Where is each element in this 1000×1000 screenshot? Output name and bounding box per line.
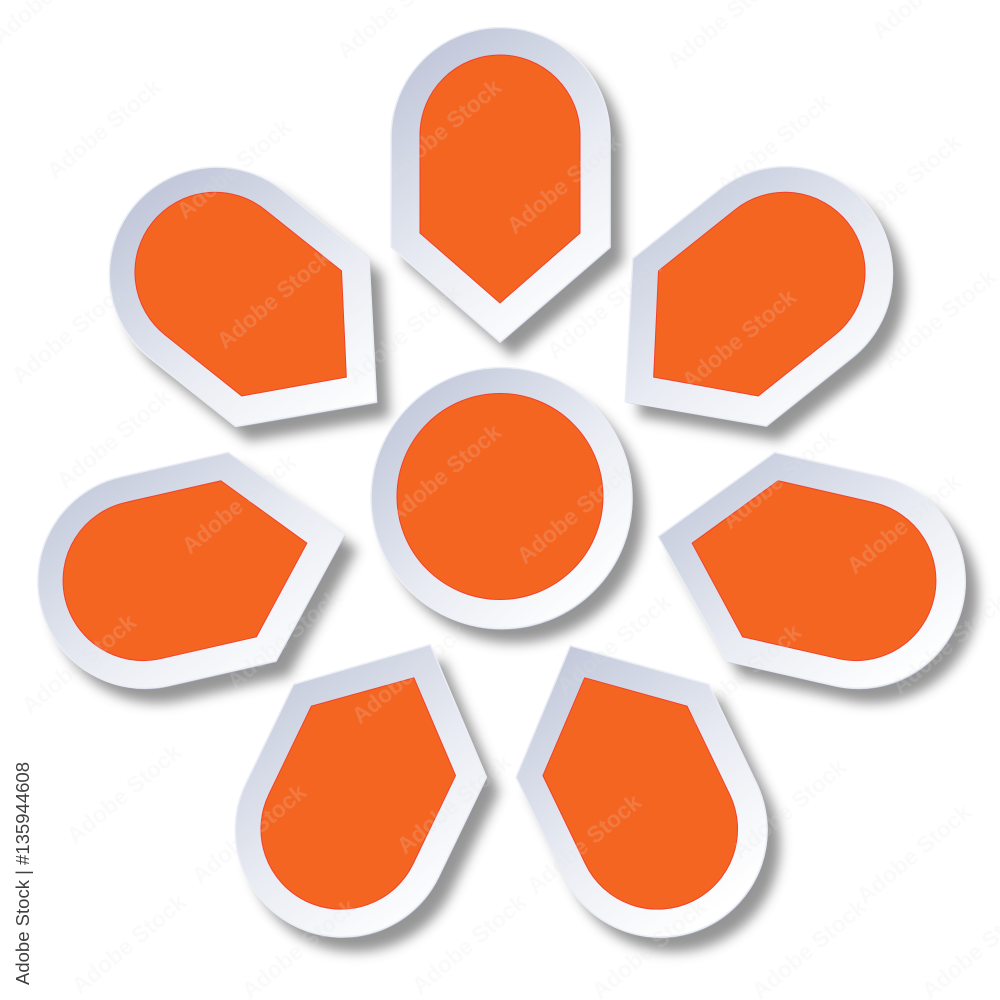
watermark pattern: Adobe Stock: [42, 73, 166, 184]
watermark pattern: Adobe Stock: [542, 253, 666, 364]
watermark pattern: Adobe Stock: [552, 588, 676, 699]
watermark pattern: Adobe Stock: [512, 458, 636, 569]
petal: top: [391, 28, 623, 357]
watermark pattern: Adobe Stock: [712, 88, 836, 199]
watermark pattern: Adobe Stock: [727, 753, 851, 864]
watermark pattern: Adobe Stock: [842, 468, 966, 579]
watermark pattern: Adobe Stock: [392, 748, 516, 859]
watermark pattern: Adobe Stock: [852, 798, 976, 909]
watermark pattern: Adobe Stock: [877, 263, 1000, 374]
watermark pattern: Adobe Stock: [682, 618, 806, 729]
watermark pattern: Adobe Stock: [7, 278, 131, 389]
watermark pattern: Adobe Stock: [407, 888, 531, 999]
watermark pattern: Adobe Stock: [382, 418, 506, 529]
watermark pattern: Adobe Stock: [172, 113, 296, 224]
watermark pattern: Adobe Stock: [382, 73, 506, 184]
petal: lower left: [199, 599, 541, 988]
watermark pattern: Adobe Stock: [342, 278, 466, 389]
petal: right: [635, 431, 999, 724]
petal: upper right: [558, 123, 949, 500]
watermark pattern: Adobe Stock: [52, 383, 176, 494]
watermark pattern: Adobe Stock: [502, 128, 626, 239]
stock id caption: Adobe Stock | #135944608: [13, 762, 33, 985]
watermark pattern: Adobe Stock: [17, 608, 141, 719]
watermark pattern: Adobe Stock: [677, 283, 801, 394]
watermark pattern: Adobe Stock: [177, 448, 301, 559]
watermark pattern: Adobe Stock: [62, 738, 186, 849]
watermark pattern: Adobe Stock: [347, 618, 471, 729]
watermark pattern: Adobe Stock: [67, 888, 191, 999]
watermark pattern: Adobe Stock: [717, 423, 841, 534]
watermark pattern: Adobe Stock: [842, 128, 966, 239]
petal: lower right: [475, 599, 816, 988]
watermark pattern: Adobe Stock: [187, 778, 311, 889]
center circle: [371, 368, 644, 643]
petal: upper left: [66, 124, 456, 501]
watermark pattern: Adobe Stock: [222, 583, 346, 694]
petal: left: [17, 431, 381, 724]
watermark pattern: Adobe Stock: [212, 243, 336, 354]
watermark pattern: Adobe Stock: [522, 788, 646, 899]
